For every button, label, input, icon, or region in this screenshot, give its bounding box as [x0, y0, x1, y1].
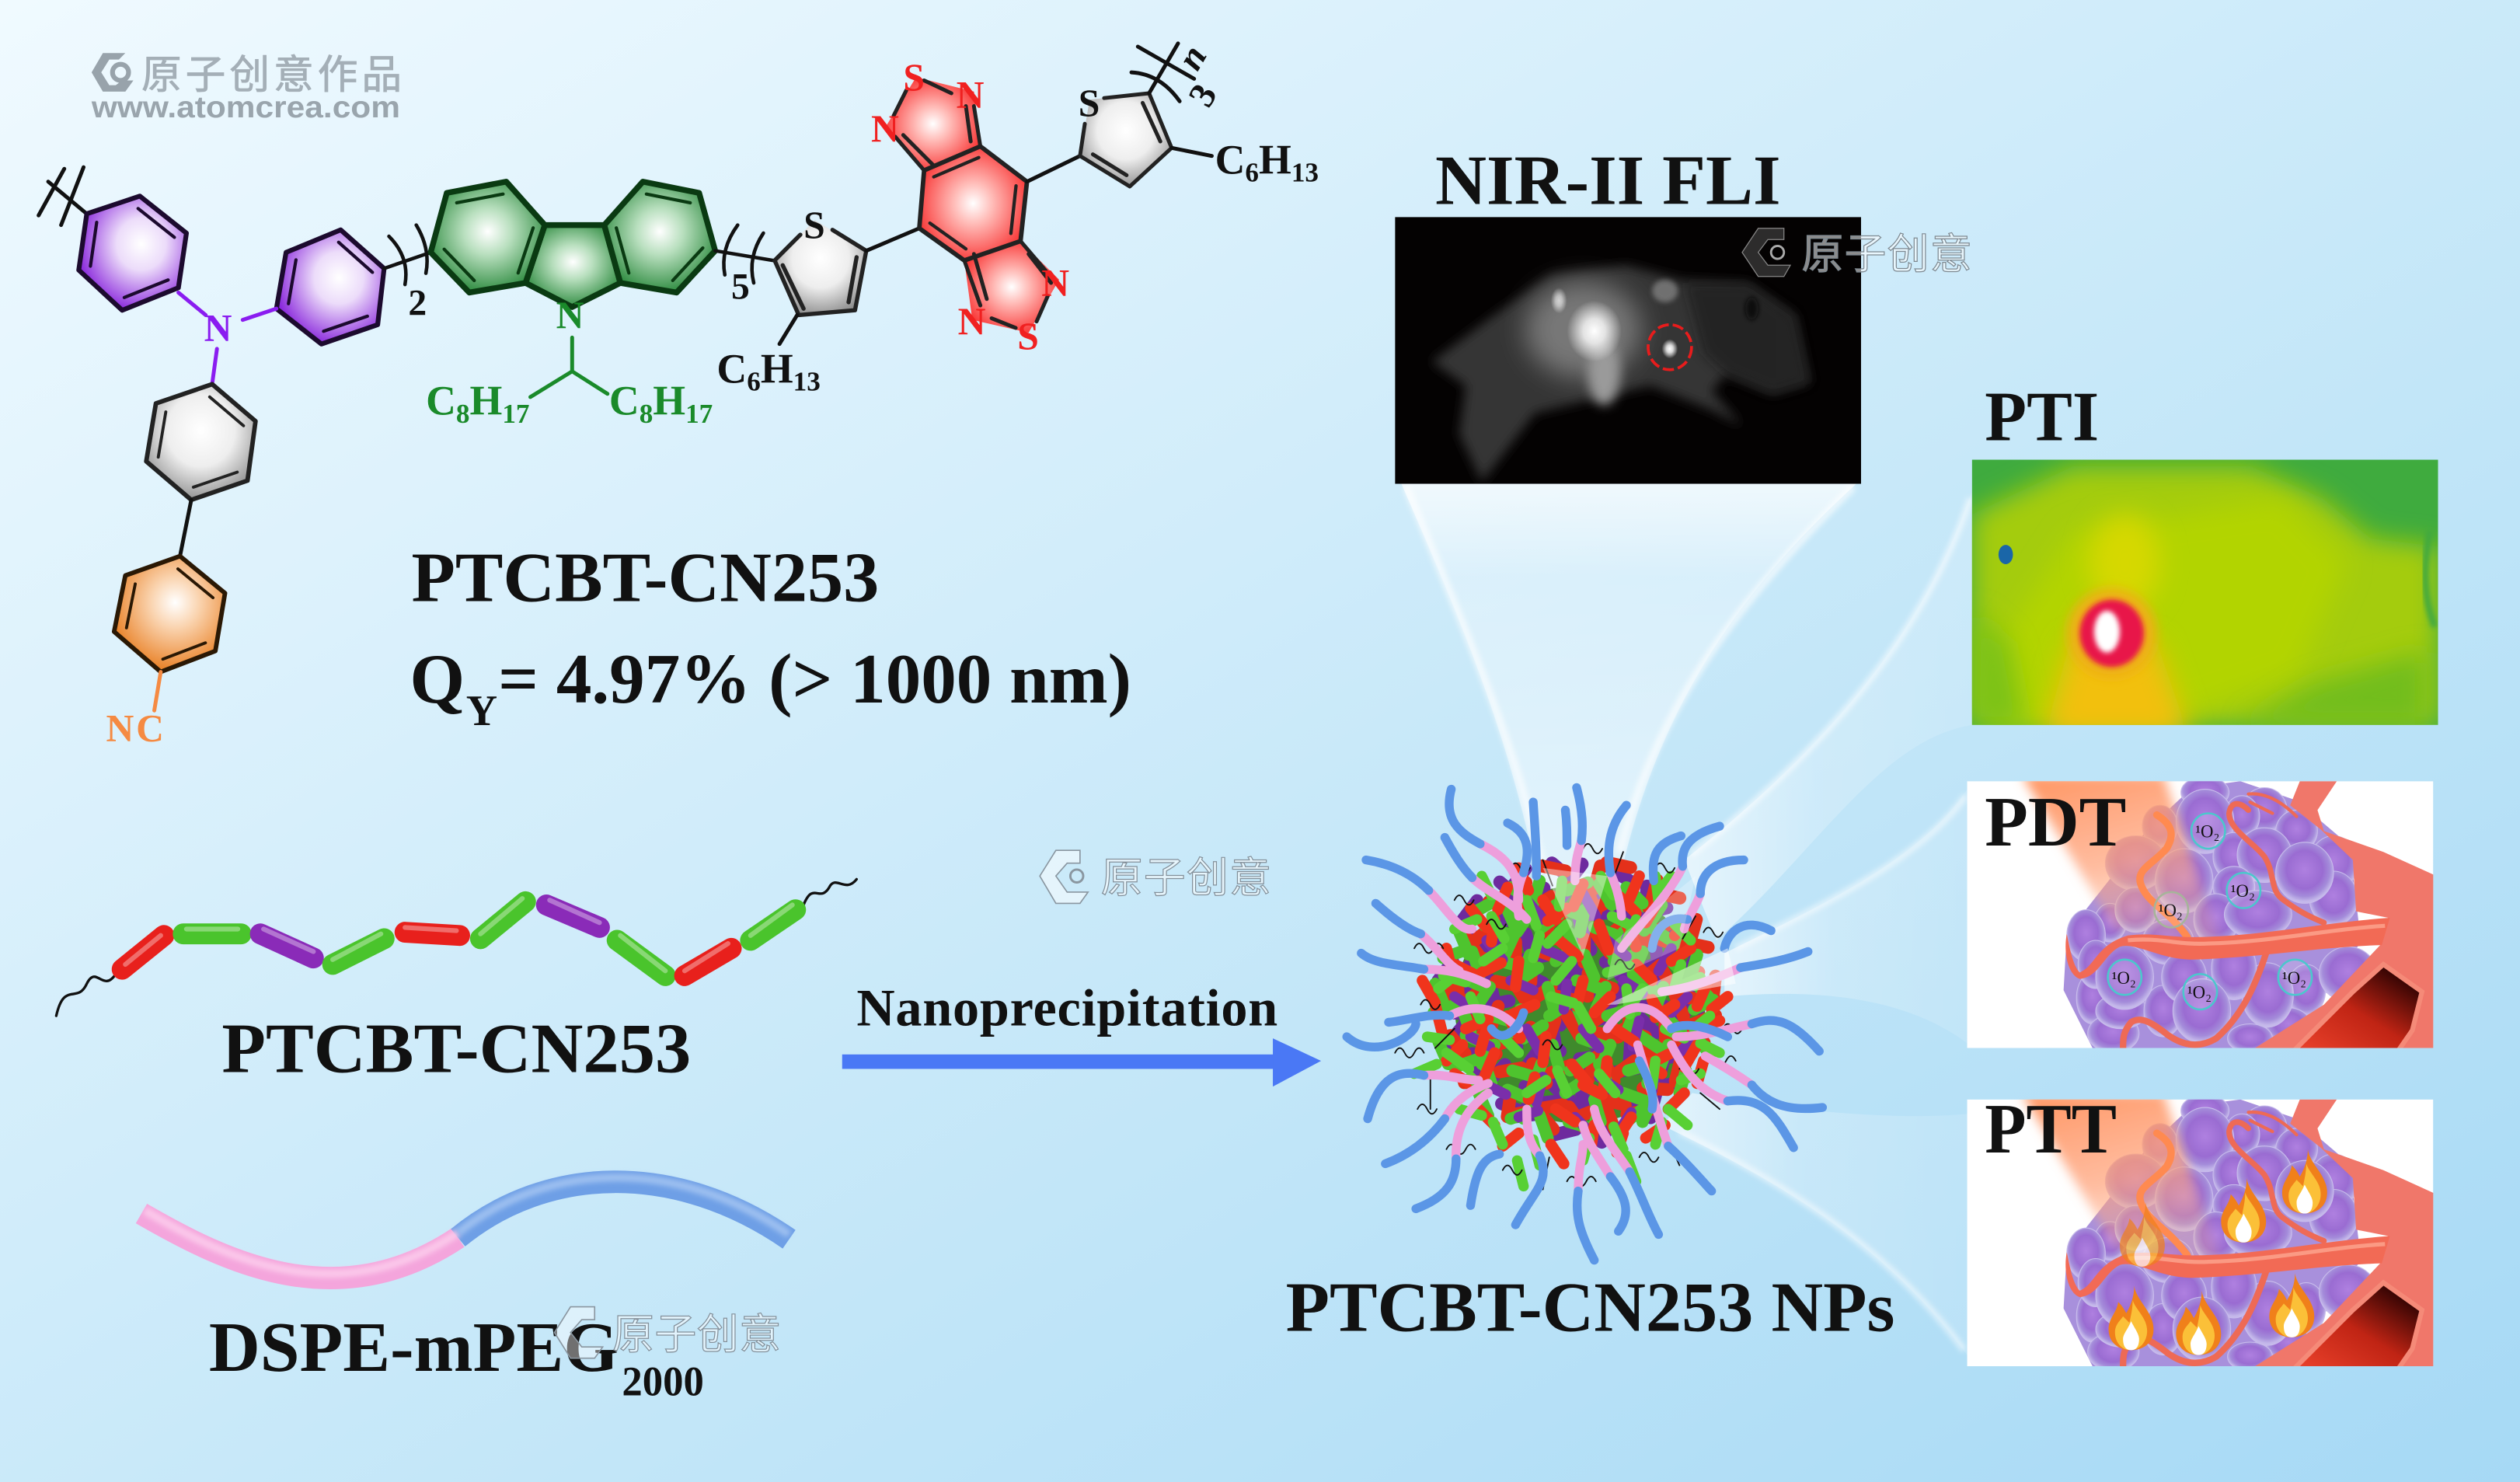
thiophene 1: 13 — [793, 367, 821, 397]
watermark: lower left — [555, 1307, 781, 1358]
thiophene 2: H — [1259, 136, 1291, 183]
watermark: logo on NIR panel — [1742, 228, 1972, 277]
rods: bright green — [1414, 876, 1720, 1186]
watermark: centre — [1040, 850, 1271, 903]
label: DSPE-mPEG2000: 2000 — [622, 1358, 704, 1404]
benzobisthiadiazole unit — [871, 56, 1069, 357]
terminal bracket 3 and n — [1131, 39, 1225, 113]
thiophene 2: C — [1215, 136, 1245, 183]
panel: PDT — [1968, 775, 2436, 1053]
thiophene 2: 13 — [1291, 158, 1319, 188]
carbazole unit: N — [556, 294, 584, 337]
arrow: nanoprecipitation — [842, 1038, 1321, 1086]
label: DSPE-mPEG2000 — [209, 1308, 704, 1404]
biphenyl bond — [180, 500, 191, 556]
thiophene 1 — [716, 204, 866, 397]
heading: PTT: PTT — [1985, 1090, 2117, 1168]
repeat bracket 2 — [384, 225, 430, 323]
carbazole unit: 17 — [502, 399, 529, 429]
thiophene 2: 6 — [1245, 158, 1259, 188]
label: PTCBT-CN253 chain: PTCBT-CN253 — [221, 1010, 691, 1088]
carbazole unit: 17 — [685, 399, 713, 429]
beam: NIR-II FLI — [1402, 484, 1856, 948]
beam: PTT — [1662, 1093, 1968, 1355]
flames — [2109, 1149, 2327, 1355]
particle core backing — [1455, 886, 1705, 1124]
panel: PDT: ¹O₂ — [2159, 901, 2183, 920]
thiophene 1: S — [803, 204, 825, 246]
repeat bracket 2: 2 — [408, 283, 427, 323]
purple ring 1 — [78, 196, 186, 310]
purple ring 2 — [277, 230, 384, 344]
nitrile group: NC — [106, 706, 164, 749]
tumor dashed marker — [1648, 325, 1692, 370]
watermark: top-left: 原子创意作品 — [141, 52, 402, 97]
rods: base green — [1434, 880, 1713, 1138]
heading: PTCBT-CN253: PTCBT-CN253 — [411, 539, 879, 617]
watermark: centre: 原子创意 — [1101, 855, 1271, 901]
benzobisthiadiazole unit: N — [958, 300, 986, 343]
nitrile group — [106, 672, 164, 749]
panel: NIR-II fluorescence image — [1395, 217, 1861, 484]
carbazole unit: 8 — [456, 399, 469, 429]
beam: PTI — [1685, 490, 1972, 940]
text: quantum yield: = 4.97% (> 1000 nm) — [498, 640, 1131, 718]
polymer chain illustration — [56, 879, 856, 1016]
DSPE-mPEG chain illustration — [141, 1177, 789, 1278]
benzobisthiadiazole unit: N — [1041, 262, 1069, 305]
link bond 2 — [1027, 156, 1080, 182]
benzobisthiadiazole unit: S — [903, 56, 925, 99]
rods: hidden layer red — [1394, 808, 1765, 1185]
carbazole unit: H — [653, 378, 685, 424]
benzobisthiadiazole unit: N — [957, 74, 985, 117]
carbazole unit: 8 — [640, 399, 653, 429]
terminal bond with hash marks — [39, 167, 87, 225]
thiophene 1: 6 — [747, 367, 761, 397]
benzobisthiadiazole unit: N — [871, 107, 899, 150]
beam: PDT — [1724, 790, 1968, 1043]
panel: PDT: ¹O₂ — [2231, 881, 2255, 901]
heading: NIR-II FLI: NIR-II FLI — [1435, 141, 1781, 220]
thiophene 1: C — [716, 345, 747, 392]
watermark: top-left: www.atomcrea.com — [91, 90, 400, 124]
grey ring — [146, 384, 256, 500]
carbazole unit: C — [426, 378, 456, 424]
triphenylamine nitrogen: N — [204, 307, 232, 350]
molecule: PTCBT-CN253 structure — [39, 39, 1319, 749]
particle squiggles — [1395, 844, 1742, 1190]
singlet oxygen bubbles — [2107, 814, 2312, 1010]
watermark: logo on NIR panel: 原子创意 — [1801, 231, 1972, 277]
panel: PDT: ¹O₂ — [2282, 968, 2306, 988]
panel: PDT: ¹O₂ — [2195, 822, 2219, 842]
heading: PDT: PDT — [1985, 783, 2126, 861]
carbazole unit: H — [469, 378, 502, 424]
repeat bracket 5: 5 — [731, 267, 750, 308]
label: PTCBT-CN253 NPs: PTCBT-CN253 NPs — [1286, 1268, 1894, 1347]
text: quantum yield: Y — [466, 687, 497, 735]
heading: PTI: PTI — [1985, 378, 2099, 456]
text: quantum yield: Q — [410, 640, 465, 718]
panel: photothermal image — [1972, 460, 2438, 736]
benzobisthiadiazole unit: S — [1017, 315, 1039, 357]
polymer arms: pink — [1420, 841, 1751, 1191]
panel: PTT — [1968, 1093, 2436, 1371]
thiophene 2 — [1079, 82, 1319, 188]
polymer arms: blue — [1347, 787, 1822, 1261]
label: DSPE-mPEG2000: DSPE-mPEG — [209, 1308, 619, 1386]
repeat bracket 5 — [715, 225, 773, 308]
nanoparticle: PTCBT-CN253 NPs — [1347, 787, 1822, 1261]
rods: hidden layer purple — [1391, 816, 1754, 1187]
watermark: lower left: 原子创意 — [612, 1311, 781, 1358]
label: Nanoprecipitation: Nanoprecipitation — [856, 978, 1277, 1037]
thiophene 2: S — [1079, 82, 1100, 124]
panel: PDT: ¹O₂ — [2187, 982, 2212, 1002]
orange ring — [114, 556, 225, 672]
triphenylamine nitrogen — [179, 292, 277, 384]
panel: PDT: ¹O₂ — [2112, 968, 2136, 988]
watermark: top-left — [91, 52, 402, 124]
rods: deep purple — [1455, 894, 1696, 1133]
light tip overlays — [1543, 868, 1607, 957]
carbazole unit — [426, 182, 715, 429]
thiophene 1: H — [761, 345, 793, 392]
link bond — [866, 228, 919, 251]
rods: bright red — [1422, 868, 1727, 1163]
carbazole unit: C — [609, 378, 640, 424]
terminal bracket 3 and n: n — [1169, 39, 1215, 77]
terminal bracket 3 and n: 3 — [1181, 78, 1225, 113]
